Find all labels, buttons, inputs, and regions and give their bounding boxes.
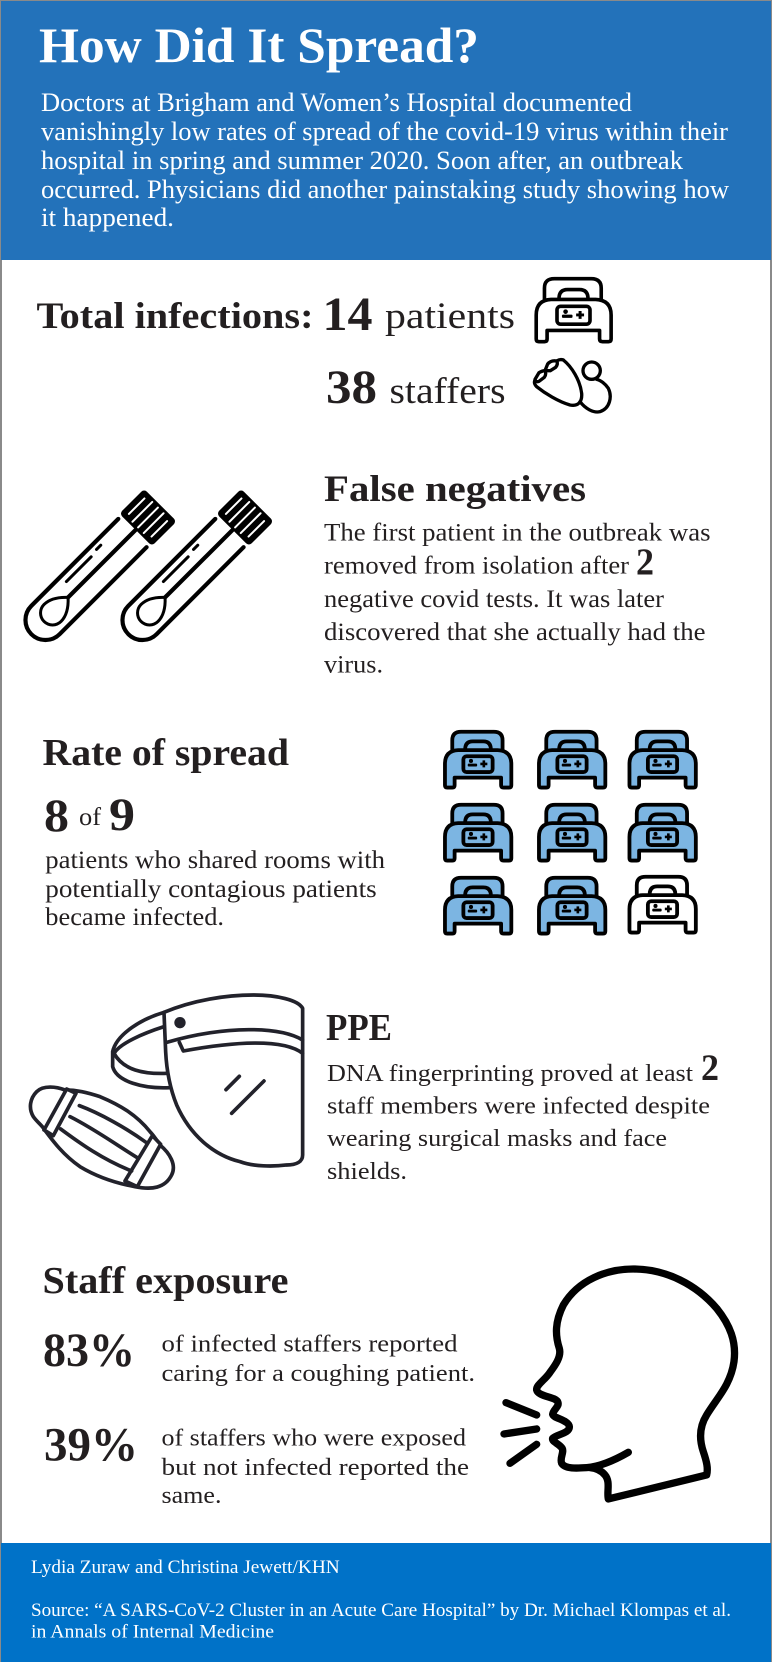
panel: total infections [36,279,611,414]
body text: rate of spread: patients who shared rooms with [45,847,386,874]
text: 39% description [162,1426,469,1509]
body text: rate of spread: became infected. [45,904,224,931]
icon: swab test tube [15,489,177,650]
heading: total infections: Total infections: [36,296,314,337]
source text: Source: “A SARS-CoV-2 Cluster in an Acute Care Hospital” by Dr. Michael Klompas et al. [31,1601,731,1621]
body text: false negatives: The first patient in the outbreak was [324,520,710,546]
icon: swab test tube [112,489,274,650]
icon: stethoscope [534,360,610,412]
body text: PPE: wearing surgical masks and face [327,1126,667,1152]
header panel [1,1,771,260]
source text [31,1601,731,1643]
body text: false negatives: removed from isolation after [324,553,630,580]
body text: rate of spread: potentially contagious patients [45,876,377,903]
intro paragraph: it happened. [41,203,174,232]
intro paragraph: vanishingly low rates of spread of the covid-19 virus within their [41,117,728,146]
panel: rate of spread [42,732,696,934]
intro paragraph: occurred. Physicians did another painstaking study showing how [41,175,729,204]
body text: false negatives [324,520,710,678]
stat: 83%: 83% [43,1324,135,1377]
credit line: Lydia Zuraw and Christina Jewett/KHN [31,1558,340,1578]
body text: PPE: shields. [327,1159,407,1185]
text: 83% description: caring for a coughing patient. [162,1361,475,1387]
panel: staff exposure [42,1260,735,1509]
stat: 8 of 9 [44,789,135,842]
panel: PPE [30,995,719,1188]
body text: PPE: DNA fingerprinting proved at least [327,1061,693,1087]
text: 83% description: of infected staffers reported [162,1332,458,1358]
icon grid: 9 beds, 8 blue [445,732,696,934]
stat: 38 staffers [326,361,506,414]
stat: 39%: 39% [44,1418,138,1472]
stat: 14 patients: 14 [322,288,372,341]
stat: 8 of 9: 9 [109,789,135,841]
text: 39% description: same. [162,1483,222,1509]
heading: staff exposure: Staff exposure [42,1260,288,1302]
body text: false negatives: negative covid tests. It was later [324,586,665,613]
text: 83% description [162,1332,475,1387]
icon: face shield [113,995,303,1166]
body text: false negatives: 2 [636,542,654,584]
body text: PPE: 2 [701,1048,719,1089]
stat: 8 of 9: of [79,804,102,831]
footer panel [1,1543,771,1662]
body text: PPE [327,1048,719,1185]
stat: 14 patients [322,288,515,341]
intro paragraph: hospital in spring and summer 2020. Soon after, an outbreak [41,146,683,175]
stat: 14 patients: patients [385,296,515,337]
title: How Did It Spread? [39,17,479,73]
body text: false negatives: discovered that she actually had the [324,619,706,646]
body text: rate of spread [45,847,386,931]
stat: 8 of 9: 8 [44,790,69,842]
heading: false negatives: False negatives [324,469,586,510]
intro paragraph: Doctors at Brigham and Women’s Hospital documented [41,88,632,117]
icon: hospital bed [536,279,611,342]
body text: PPE: staff members were infected despite [327,1094,710,1120]
intro paragraph [41,88,729,232]
text: 39% description: of staffers who were exposed [162,1426,466,1452]
stat: 38 staffers: staffers [390,371,506,412]
text: 39% description: but not infected reported the [162,1455,469,1481]
heading: PPE: PPE [326,1007,392,1049]
icon: surgical mask [30,1087,173,1188]
panel: false negatives [15,469,711,678]
body text: false negatives: virus. [324,651,383,678]
heading: rate of spread: Rate of spread [42,732,289,774]
source text: in Annals of Internal Medicine [31,1623,274,1643]
icon: coughing head [504,1269,735,1499]
stat: 38 staffers: 38 [326,361,377,414]
